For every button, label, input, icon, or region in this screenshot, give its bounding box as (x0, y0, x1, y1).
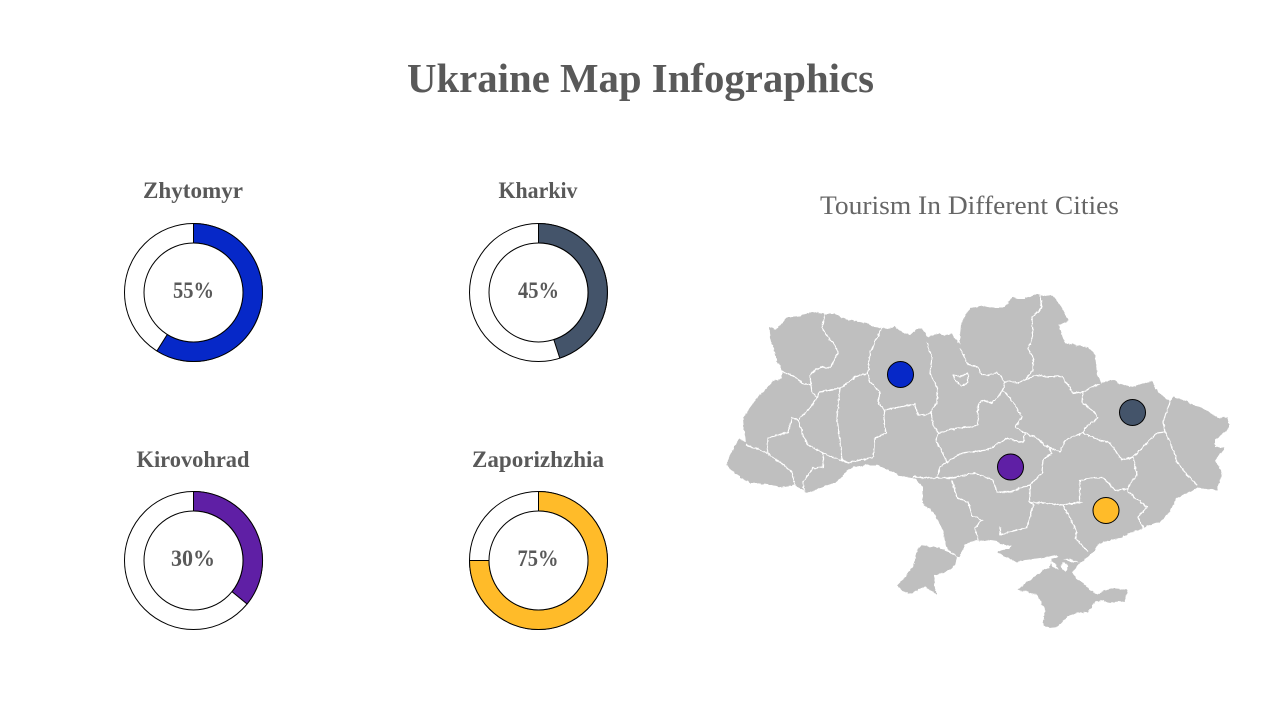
donut chart: Zaporizhzhia (470, 492, 608, 630)
marker: Kharkiv (1120, 400, 1146, 426)
value: 45%: 45% (518, 278, 559, 303)
map landmass and oblast borders (727, 294, 1229, 628)
subtitle: Tourism In Different Cities (820, 191, 1119, 220)
value: 75%: 75% (518, 546, 558, 571)
map: Ukraine regions (727, 294, 1229, 628)
marker: Zaporizhzhia (1093, 498, 1119, 524)
panel: Zhytomyr donut (124, 178, 262, 362)
donut chart: Kharkiv (470, 224, 608, 362)
heading: Zhytomyr: Zhytomyr (143, 178, 243, 203)
marker: Zhytomyr (888, 362, 914, 388)
heading: Kirovohrad: Kirovohrad (136, 447, 250, 472)
marker: Kirovohrad (998, 454, 1024, 480)
panel: Zaporizhzhia donut (470, 447, 608, 630)
panel: Kharkiv donut (470, 178, 608, 362)
value: 30%: 30% (171, 546, 215, 571)
panel: Kirovohrad donut (124, 447, 263, 630)
heading: Zaporizhzhia: Zaporizhzhia (472, 447, 604, 472)
donut chart: Kirovohrad (124, 492, 263, 630)
donut chart: Zhytomyr (124, 224, 262, 362)
title: Ukraine Map Infographics (407, 55, 874, 101)
heading: Kharkiv: Kharkiv (498, 178, 578, 203)
value: 55%: 55% (173, 278, 214, 303)
